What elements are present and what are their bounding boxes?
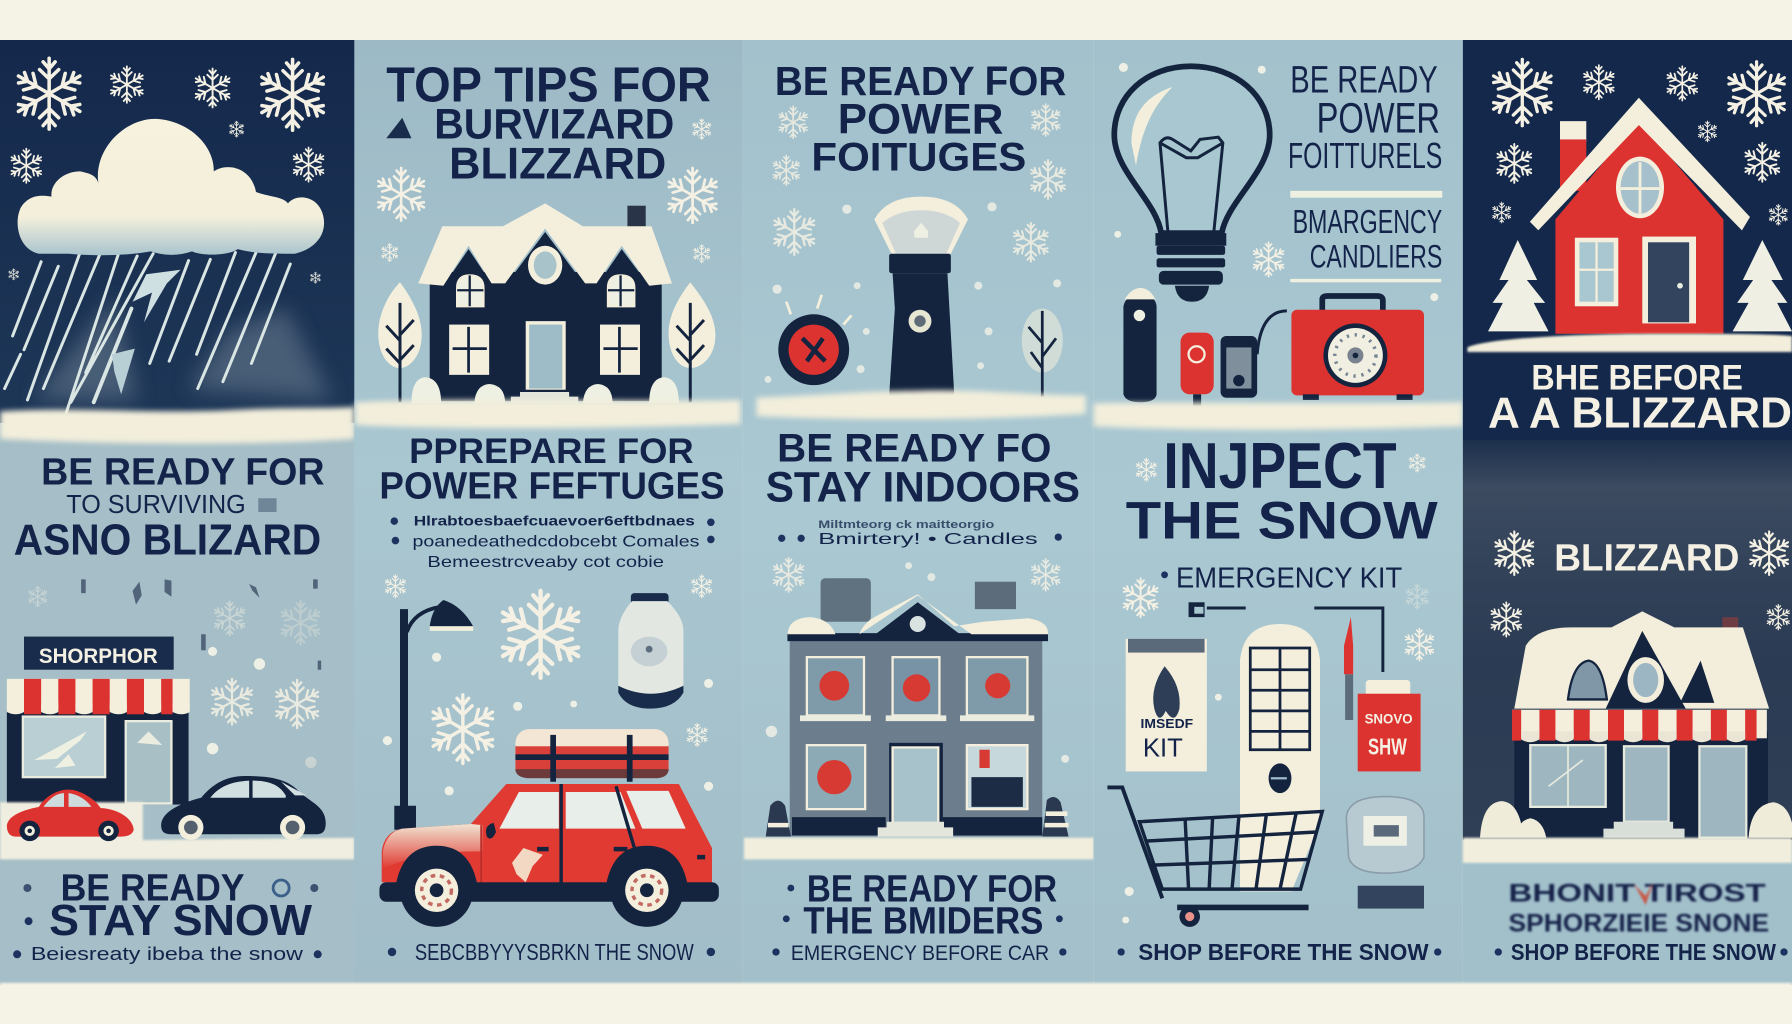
bottom text: THE BMIDERS: [803, 900, 1043, 942]
snowflakes: [765, 104, 1067, 383]
red shop box: SNOVO: [1365, 711, 1413, 726]
shopping cart: [1107, 787, 1322, 907]
snowy trees: [1488, 240, 1792, 331]
bullet text: [778, 519, 1062, 548]
subheading: [379, 431, 725, 506]
cart wheel: [1179, 906, 1200, 927]
snow strip: [757, 390, 1086, 419]
panel 3: power outages and indoors: [743, 40, 1094, 985]
snowflakes: [766, 558, 1069, 763]
heading: POWER: [838, 96, 1003, 143]
heading: A A BLIZZARD: [1488, 389, 1792, 437]
small smudge icon: [258, 498, 277, 512]
snow strip: [1094, 402, 1463, 430]
heading: TOP TIPS FOR: [386, 59, 711, 113]
tall white unit: [1240, 624, 1320, 891]
red shop box: SHW: [1368, 733, 1407, 759]
door: [889, 743, 943, 823]
window: [1575, 238, 1618, 306]
bottom snow band: [0, 983, 1792, 992]
wheels: [395, 846, 688, 927]
side shrubs: [766, 797, 1069, 837]
heading: [775, 58, 1066, 179]
rain streaks and lightning: [5, 253, 290, 413]
divider: [1290, 279, 1441, 282]
heading: FOITTURELS: [1288, 135, 1442, 176]
awning: [1512, 710, 1767, 742]
heading: FOITUGES: [811, 135, 1026, 179]
bottom text: SEBCBBYYYSBRKN THE SNOW: [415, 939, 694, 965]
faint snowflakes and flecks: [27, 579, 322, 768]
trees: [378, 282, 715, 402]
heading: ASNO BLIZARD: [14, 516, 321, 564]
bottom text: [772, 868, 1067, 965]
kit box: KIT: [1143, 733, 1183, 763]
house: [378, 203, 715, 403]
heading: [1488, 358, 1792, 437]
door two: [1699, 746, 1746, 838]
cloud: [18, 119, 324, 255]
bullet list: poanedeathedcdobcebt Comales: [413, 533, 699, 550]
lower windows: [449, 325, 640, 375]
red car: [7, 790, 134, 841]
blurred bottom text: [1509, 880, 1769, 937]
heading: BLIZZARD: [449, 139, 666, 188]
heading: TO SURVIVING: [66, 489, 246, 519]
lamp post: [394, 600, 473, 830]
bottom text: BE READY: [61, 867, 245, 909]
heading: BE READY: [1290, 59, 1438, 101]
round window: [1616, 157, 1664, 218]
big heading: INJPECT: [1163, 429, 1397, 502]
heading: BHE BEFORE: [1531, 358, 1743, 398]
door: [526, 321, 566, 390]
snowflakes: [383, 575, 713, 795]
snow strip: [0, 407, 354, 444]
snowflakes: [1489, 59, 1789, 225]
heading: BE READY FOR: [41, 451, 325, 493]
heading: [386, 59, 711, 188]
bottle: [618, 593, 683, 709]
torch: [1123, 288, 1157, 402]
kit box: [1126, 639, 1207, 771]
blurred bottom text: BHONIT TIROST: [1509, 880, 1767, 908]
black car: [161, 776, 326, 840]
panel 4: power outages and emergency kit: [1094, 40, 1463, 985]
blizzard label: BLIZZARD: [1554, 536, 1739, 578]
subheading: PPREPARE FOR: [409, 431, 694, 471]
sub heading: [1293, 204, 1442, 274]
shop window: [1530, 745, 1606, 807]
bracket items: [1189, 602, 1383, 720]
subheading: POWER FEFTUGES: [379, 464, 725, 506]
dormers: [1568, 657, 1714, 703]
kit line: EMERGENCY KIT: [1176, 562, 1402, 594]
door: [1642, 237, 1696, 323]
sub heading: CANDLIERS: [1310, 238, 1442, 274]
sub heading: BMARGENCY: [1293, 204, 1442, 241]
bullet list: Bemeestrcveaby cot cobie: [427, 554, 664, 571]
bottom text: EMERGENCY BEFORE CAR: [791, 940, 1049, 965]
flashlight: [874, 197, 968, 395]
snowflakes and dots: [1114, 63, 1438, 301]
bottom text: STAY SNOW: [49, 897, 312, 945]
red battery: [1181, 333, 1214, 406]
apartment building: [766, 578, 1069, 837]
shop: [7, 637, 190, 805]
panel 1: blizzard storm and shop: [0, 40, 355, 985]
big heading: [1126, 429, 1438, 550]
triangle icon: [386, 118, 411, 138]
windows: [800, 657, 1034, 809]
shrubs: [1480, 801, 1792, 838]
snow strip: [355, 400, 741, 428]
heading: POWER: [1317, 95, 1440, 142]
red car with roof luggage: [379, 729, 719, 927]
bullet list: Hlrabtoesbaefcuaevoer6eftbdnaes: [414, 514, 695, 529]
light bulb: [1114, 66, 1270, 302]
bottom text: SHOP BEFORE THE SNOW: [1138, 939, 1429, 965]
panel 2: prepare the house and car: [354, 40, 743, 985]
awning: [7, 679, 190, 714]
bottom text: [13, 867, 322, 964]
bottom text: Beiesreaty ibeba the snow: [31, 943, 304, 964]
heading: BURVIZARD: [434, 100, 674, 147]
red case with dial: [1291, 296, 1424, 400]
snow strip: [744, 838, 1094, 859]
roof luggage: [515, 729, 669, 782]
snowflakes: [1489, 531, 1791, 637]
round window: [528, 246, 562, 285]
big heading: THE SNOW: [1126, 491, 1438, 550]
shop house: [1480, 611, 1792, 838]
bullet text: Bmirtery! • Candles: [818, 531, 1038, 548]
panel 5: before a blizzard: [1463, 40, 1792, 985]
divider: [1290, 191, 1442, 198]
arched windows: [457, 275, 634, 306]
subheading: BE READY FO: [777, 427, 1051, 471]
kit box: IMSEDF: [1141, 717, 1193, 731]
door logo: [512, 848, 543, 882]
snowflakes: [375, 119, 720, 263]
tree: [1022, 309, 1063, 397]
no-power badge: [778, 295, 851, 385]
heading: [14, 451, 325, 564]
bullet text: Miltmteorg ck maitteorgio: [818, 519, 994, 531]
snowflakes: [8, 58, 328, 283]
snow strip: [1467, 334, 1792, 352]
shop sign: SHORPHOR: [39, 643, 158, 668]
scale device: [1346, 797, 1424, 909]
subheading: [766, 427, 1080, 511]
heading: BE READY FOR: [775, 58, 1066, 104]
snowflakes: [1121, 454, 1435, 923]
ground snow: [0, 802, 354, 859]
radio device: [1221, 336, 1257, 398]
blurred bottom text: SPHORZIEIE SNONE: [1509, 909, 1769, 937]
red house: [1531, 99, 1749, 334]
bullet list: [391, 514, 715, 571]
storm haze: [34, 297, 331, 400]
heading: [1288, 59, 1442, 176]
door: [1624, 746, 1669, 822]
shop sign: [24, 637, 174, 670]
subheading: STAY INDOORS: [766, 464, 1080, 511]
bottom text: BE READY FOR: [807, 868, 1057, 910]
shrubs: [411, 377, 679, 403]
red shop box: [1358, 680, 1421, 771]
snow strip: [1463, 838, 1792, 863]
